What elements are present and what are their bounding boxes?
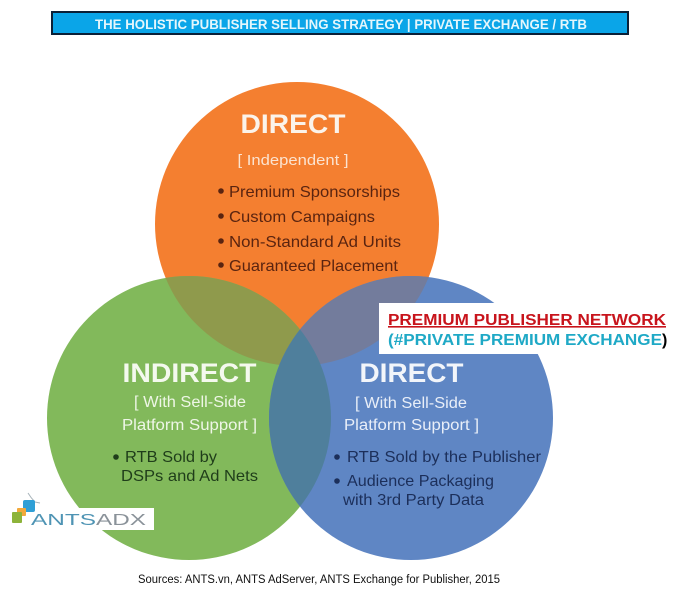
title banner <box>52 12 628 34</box>
source note: Sources: ANTS.vn, ANTS AdServer, ANTS Exchange for Publisher, 2015 <box>138 574 500 586</box>
panel: indirect: DSPs and Ad Nets <box>121 468 258 485</box>
panel: indirect: RTB Sold by <box>125 449 217 466</box>
callout: premium publisher network: ) <box>662 332 667 349</box>
panel: direct with sell-side: [ With Sell-Side <box>355 395 467 412</box>
panel: direct independent: DIRECT <box>240 109 346 139</box>
logo: ANTSADX: ANTS <box>31 512 96 529</box>
logo: ANTSADX: ADX <box>96 512 147 529</box>
logo: ANTSADX <box>12 493 154 530</box>
panel: indirect: INDIRECT <box>122 358 256 388</box>
panel: direct with sell-side: Platform Support ] <box>344 417 479 434</box>
panel: direct with sell-side: DIRECT <box>360 358 464 388</box>
title banner: THE HOLISTIC PUBLISHER SELLING STRATEGY | PRIVATE EXCHANGE / RTB <box>95 16 587 32</box>
panel: indirect <box>113 358 258 485</box>
panel: direct independent: Non-Standard Ad Units <box>229 234 401 251</box>
callout: premium publisher network: PREMIUM PUBLISHER NETWORK <box>388 312 666 329</box>
panel: direct with sell-side <box>334 358 542 509</box>
panel: direct with sell-side: with 3rd Party Data <box>342 492 484 509</box>
panel: direct independent: [ Independent ] <box>238 152 348 169</box>
callout: premium publisher network <box>379 303 670 354</box>
panel: direct independent: Premium Sponsorships <box>229 184 400 201</box>
panel: direct independent: Guaranteed Placement <box>229 258 399 275</box>
callout: premium publisher network: (#PRIVATE PREMIUM EXCHANGE <box>388 332 662 349</box>
panel: direct independent: Custom Campaigns <box>229 209 375 226</box>
panel: indirect: Platform Support ] <box>122 417 257 434</box>
panel: indirect: [ With Sell-Side <box>134 394 246 411</box>
venn diagram circles <box>47 82 553 560</box>
panel: direct with sell-side: Audience Packaging <box>347 473 494 490</box>
panel: direct with sell-side: RTB Sold by the Publisher <box>347 449 542 466</box>
panel: direct independent <box>218 109 401 275</box>
